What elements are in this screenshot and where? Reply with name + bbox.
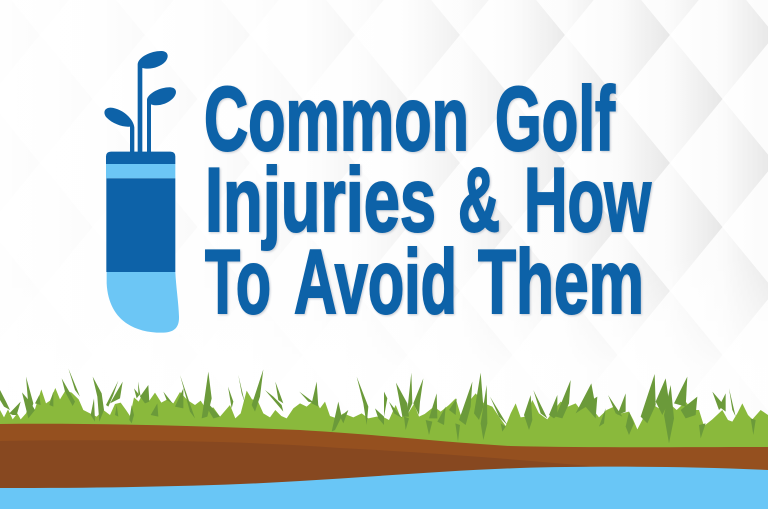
title: How [524,150,651,251]
soil: darker brown layer [0,440,590,490]
grass light left [0,368,384,460]
title [204,69,651,333]
title: Injuries [205,150,436,251]
title: Avoid [294,232,457,333]
grass [0,368,768,460]
icon: golf bag with clubs [104,51,179,333]
title: Them [478,232,644,333]
title: Golf [495,69,615,170]
icon: golf clubs [104,51,176,153]
title: Common [204,69,469,170]
bag bottom pocket [107,272,179,333]
title: & [458,150,500,251]
water [0,467,768,509]
bag body [106,178,175,272]
soil: upper brown layer [0,424,768,509]
bag light band [106,164,175,178]
title: To [205,232,271,333]
grass light right [384,373,768,460]
bag collar [106,152,175,164]
